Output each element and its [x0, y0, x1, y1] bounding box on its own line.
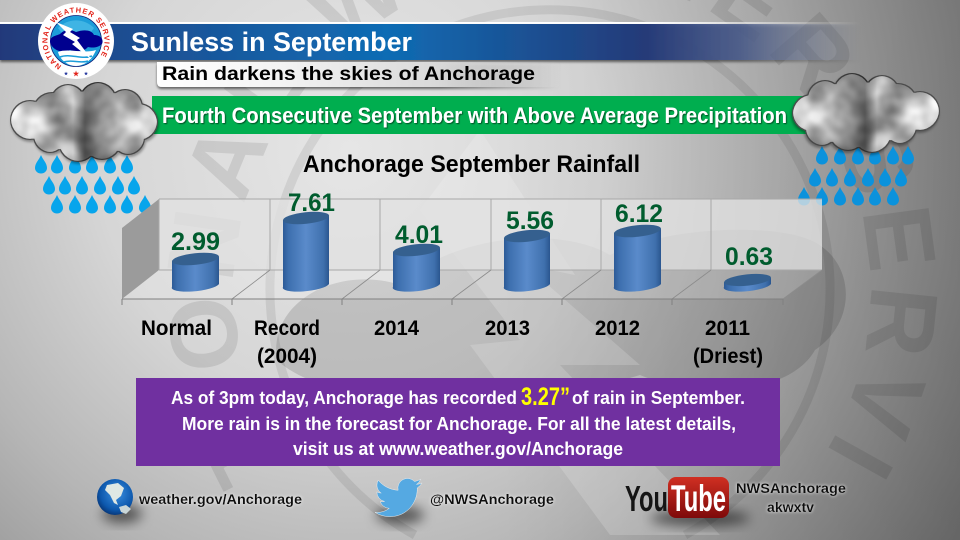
bar: Record: 7.61: [288, 189, 335, 217]
icon: globe: [97, 479, 133, 515]
title: Sunless in September: [131, 27, 412, 57]
left cloud: [10, 80, 160, 165]
purple callout: 3.27”: [521, 383, 570, 411]
twitter link: @NWSAnchorage: [430, 491, 554, 507]
category labels: (2004): [257, 344, 317, 368]
category labels: Normal: [141, 316, 212, 340]
purple callout: More rain is in the forecast for Anchorage. For all the latest details,: [182, 414, 736, 434]
bar: 2011: [723, 243, 773, 292]
bar: 2012: [613, 200, 663, 292]
headline text: Fourth Consecutive September with Above Average Precipitation: [162, 103, 787, 128]
chart title: Anchorage September Rainfall: [303, 151, 640, 178]
bar: 2014: 4.01: [395, 221, 443, 249]
youtube link: akwxtv: [767, 499, 814, 515]
bar: 2014: [392, 221, 443, 292]
left rain drops: [35, 155, 151, 214]
NWS logo: NATIONAL WEATHER SERVICE: [42, 7, 110, 70]
website link: weather.gov/Anchorage: [138, 491, 302, 507]
3D bar chart: [122, 189, 822, 368]
category labels: 2014: [374, 316, 419, 340]
chart frame: [122, 199, 822, 305]
right rain drops: [798, 146, 914, 206]
NWS logo: ★: [64, 71, 69, 76]
bar: Record: [282, 189, 335, 292]
bar: Normal: 2.99: [171, 228, 220, 256]
youtube link: NWSAnchorage: [736, 480, 846, 496]
NWS logo: ★: [84, 71, 89, 76]
purple callout: of rain in September.: [572, 388, 745, 408]
NWS logo: ★: [73, 70, 80, 78]
twitter link: [375, 478, 554, 524]
bar: 2013: 5.56: [506, 207, 554, 235]
icon: youtube logo: Tube: [671, 478, 726, 519]
subtitle text: Rain darkens the skies of Anchorage: [162, 63, 535, 85]
category labels: [141, 316, 763, 368]
purple callout: [136, 378, 780, 466]
bar: Normal: [171, 228, 220, 292]
header banner: [0, 22, 860, 60]
subtitle strip: [157, 62, 560, 87]
right cloud: [790, 71, 940, 156]
purple callout: visit us at www.weather.gov/Anchorage: [293, 439, 623, 459]
icon: youtube logo: [625, 477, 729, 519]
category labels: 2011: [705, 316, 750, 340]
youtube link: [625, 477, 846, 526]
icon: youtube logo: You: [625, 478, 668, 519]
category labels: Record: [254, 316, 320, 340]
green headline bar: [152, 96, 810, 134]
category labels: (Driest): [693, 344, 763, 368]
bar: 2011: 0.63: [725, 243, 773, 271]
category labels: 2012: [595, 316, 640, 340]
category labels: 2013: [485, 316, 530, 340]
purple callout: As of 3pm today, Anchorage has recorded: [171, 388, 517, 408]
icon: twitter bird: [375, 478, 422, 517]
bar: 2012: 6.12: [615, 200, 663, 228]
bar: 2013: [503, 207, 554, 292]
website link: [97, 479, 302, 523]
